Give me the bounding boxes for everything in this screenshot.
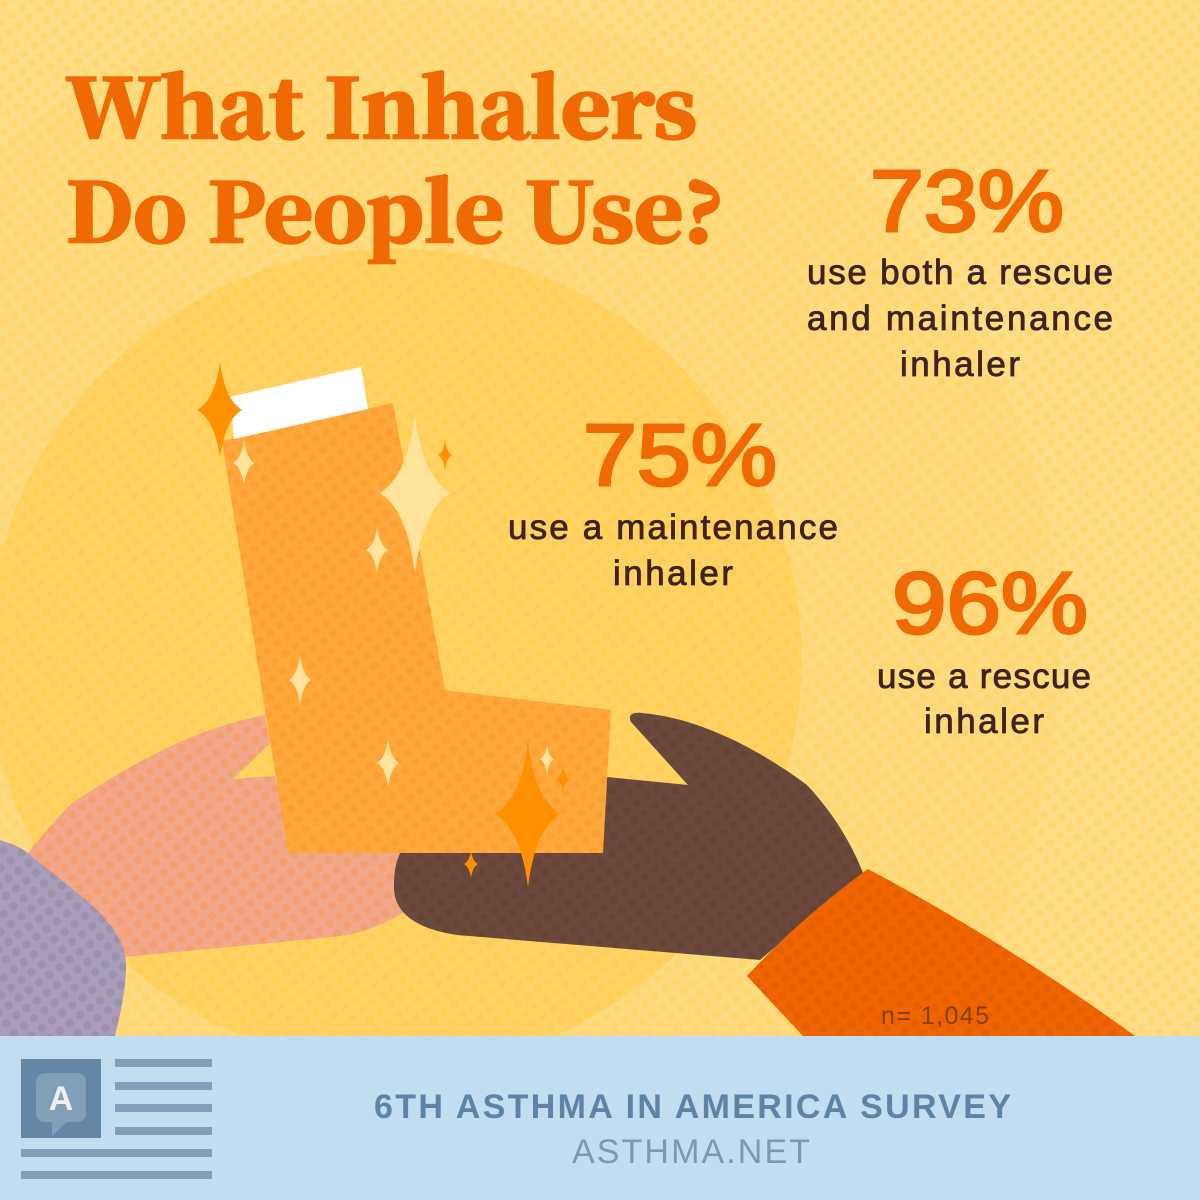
inhaler cap xyxy=(230,367,368,439)
orange sleeve xyxy=(747,869,1135,1036)
stat: 75%: 75% xyxy=(583,407,777,504)
title xyxy=(66,46,724,266)
inhaler body xyxy=(222,403,611,853)
stat: 75% xyxy=(508,407,838,593)
stat: 96%: use a rescue xyxy=(877,657,1091,696)
stat: 73%: 73% xyxy=(870,153,1064,250)
sample size: n= 1,045 xyxy=(881,1002,989,1030)
stat: 96%: inhaler xyxy=(924,702,1044,741)
lavender sleeve xyxy=(0,840,126,1036)
sparkles xyxy=(197,362,570,887)
illustration: hands holding an inhaler xyxy=(0,403,1135,1036)
light-skinned hand xyxy=(28,715,420,957)
stat: 75%: use a maintenance xyxy=(508,508,838,547)
footer icon: newspaper: A xyxy=(49,1080,73,1118)
stat: 96%: 96% xyxy=(892,555,1088,652)
footer icon: newspaper xyxy=(21,1059,212,1179)
stat: 73% xyxy=(807,153,1113,384)
stat: 96% xyxy=(877,555,1091,741)
footer survey name: 6TH ASTHMA IN AMERICA SURVEY xyxy=(374,1088,1011,1126)
title: Do People Use? xyxy=(66,150,724,266)
title: What Inhalers xyxy=(66,46,697,162)
footer website: ASTHMA.NET xyxy=(572,1133,810,1171)
stat: 73%: use both a rescue xyxy=(807,253,1113,292)
stat: 73%: and maintenance xyxy=(807,299,1113,338)
footer band xyxy=(0,1036,1200,1200)
dark-skinned hand xyxy=(394,713,863,960)
stat: 73%: inhaler xyxy=(900,345,1020,384)
stat: 75%: inhaler xyxy=(613,554,733,593)
